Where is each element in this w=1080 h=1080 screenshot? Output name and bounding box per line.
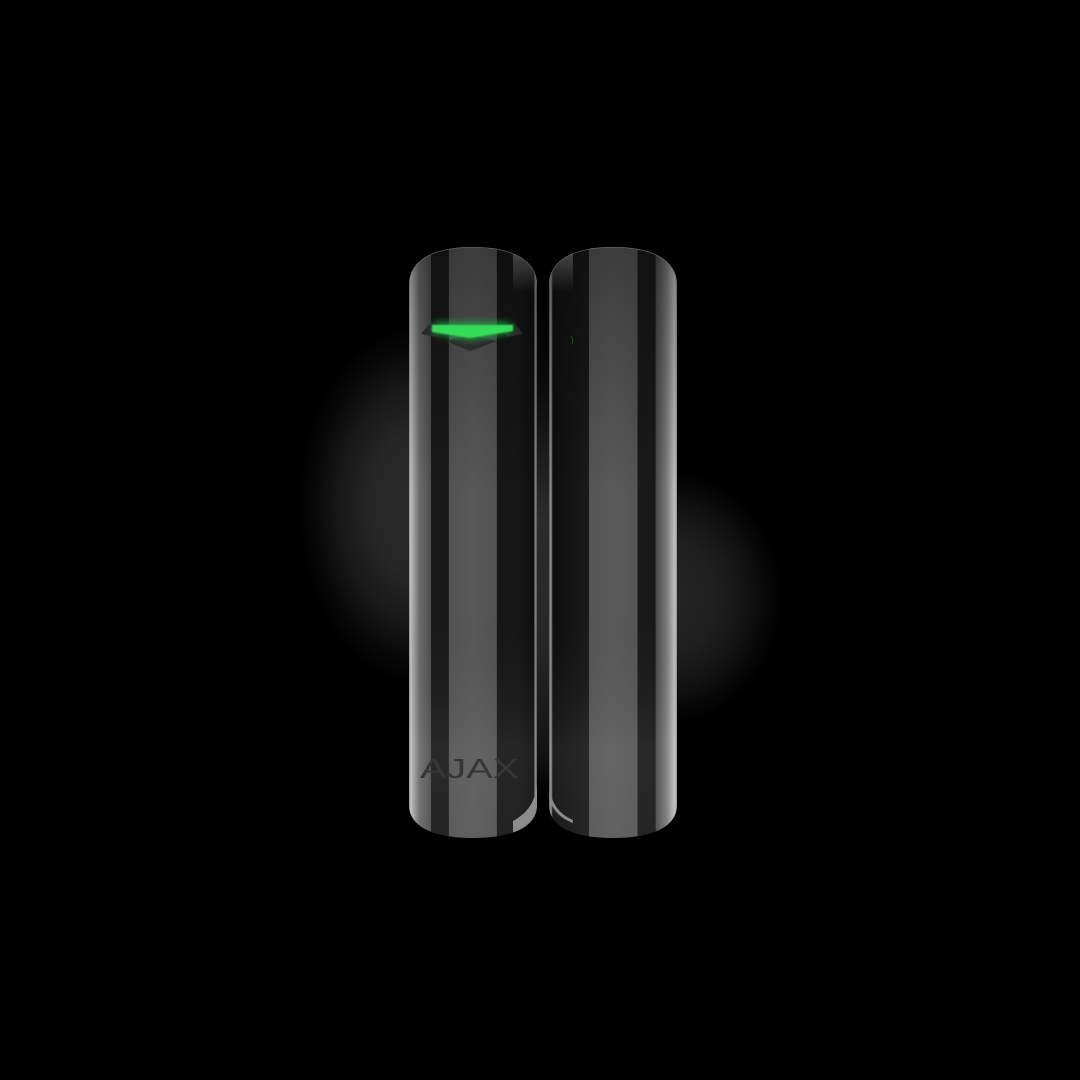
sensor body [409, 247, 541, 842]
brand wordmark: AJAX [420, 753, 519, 784]
infographic canvas [314, 247, 766, 838]
green LED indicator [432, 322, 513, 341]
magnet body [549, 247, 677, 838]
LED housing [421, 322, 523, 351]
soft background glow [298, 290, 782, 800]
small status mark [571, 336, 573, 344]
